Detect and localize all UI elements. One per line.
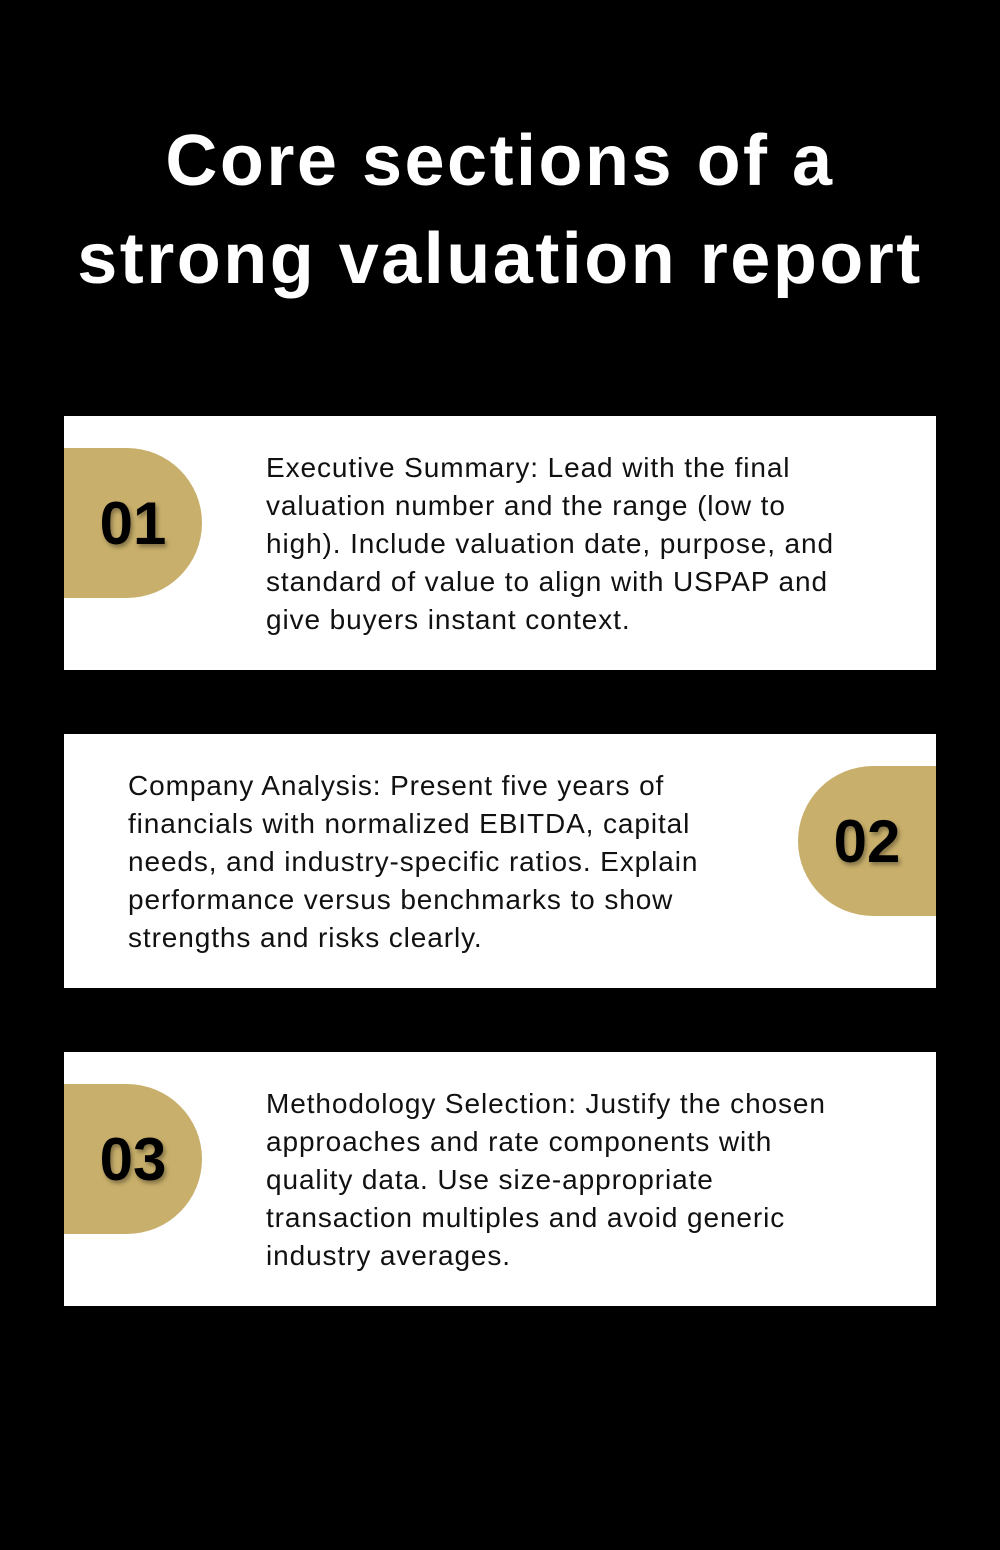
title: Core sections of a bbox=[165, 121, 835, 201]
text 01: valuation number and the range (low to bbox=[266, 490, 786, 521]
text 01: high). Include valuation date, purpose, and bbox=[266, 528, 834, 559]
text 01 bbox=[266, 452, 834, 635]
text 03: industry averages. bbox=[266, 1240, 511, 1271]
text 03 bbox=[266, 1088, 826, 1271]
text 02: Company Analysis: Present five years of bbox=[128, 770, 664, 801]
title bbox=[77, 121, 923, 299]
title: strong valuation report bbox=[77, 219, 923, 299]
badge 02 bbox=[798, 766, 936, 916]
panel: 03 methodology bbox=[64, 1052, 936, 1306]
text 02 bbox=[128, 770, 698, 953]
badge 03 bbox=[64, 1084, 202, 1234]
badge 03: 03 bbox=[100, 1126, 166, 1192]
text 01: give buyers instant context. bbox=[266, 604, 630, 635]
text 02: performance versus benchmarks to show bbox=[128, 884, 673, 915]
text 02: financials with normalized EBITDA, capital bbox=[128, 808, 690, 839]
text 03: transaction multiples and avoid generic bbox=[266, 1202, 785, 1233]
text 02: needs, and industry-specific ratios. Explain bbox=[128, 846, 698, 877]
text 03: Methodology Selection: Justify the chosen bbox=[266, 1088, 826, 1119]
badge 01 bbox=[64, 448, 202, 598]
text 03: quality data. Use size-appropriate bbox=[266, 1164, 714, 1195]
text 02: strengths and risks clearly. bbox=[128, 922, 483, 953]
panel: 01 executive summary bbox=[64, 416, 936, 670]
text 01: Executive Summary: Lead with the final bbox=[266, 452, 790, 483]
text 03: approaches and rate components with bbox=[266, 1126, 772, 1157]
panel: 02 company analysis bbox=[64, 734, 936, 988]
text 01: standard of value to align with USPAP and bbox=[266, 566, 828, 597]
badge 01: 01 bbox=[100, 490, 166, 556]
badge 02: 02 bbox=[834, 808, 900, 874]
